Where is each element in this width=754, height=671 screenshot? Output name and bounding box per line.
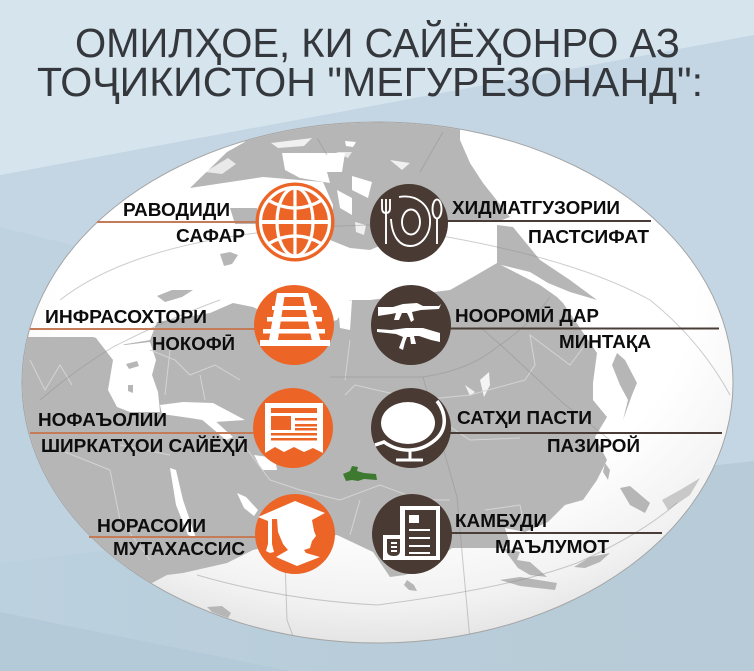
- northern seas and speckles: [205, 138, 410, 235]
- title: ТОҶИКИСТОН "МЕГУРЕЗОНАНД":: [37, 59, 703, 105]
- label: infrastructure: НОКОФӢ: [152, 334, 235, 354]
- label: infrastructure: [45, 307, 235, 354]
- label: lack of information: [455, 511, 609, 557]
- label: lack of information: МАЪЛУМОТ: [495, 537, 609, 557]
- label: tourism companies: ШИРКАТҲОИ САЙЁҲӢ: [41, 435, 248, 456]
- Eurasia and Africa land: [0, 263, 607, 600]
- leader lines: [30, 221, 722, 537]
- label: infrastructure: ИНФРАСОХТОРИ: [45, 307, 207, 327]
- icon: newspaper on banner: [253, 388, 333, 468]
- label: low quality service: ПАСТСИФАТ: [528, 227, 649, 247]
- label: tourism companies: [38, 410, 248, 456]
- icon: desk globe: [371, 388, 451, 468]
- label: low reception level: ПАЗИРОЙ: [547, 435, 640, 456]
- label: low quality service: [452, 198, 649, 247]
- label: regional unrest: [455, 306, 651, 352]
- label: tourism companies: НОФАЪОЛИИ: [38, 410, 167, 430]
- label: specialists: МУТАХАССИС: [113, 539, 245, 559]
- label: regional unrest: МИНТАҚА: [559, 332, 651, 352]
- small Mediterranean islands: [126, 361, 139, 393]
- icon: graduate silhouette: [255, 494, 335, 574]
- icon: documents: [372, 494, 452, 574]
- label: specialists: НОРАСОИИ: [97, 516, 206, 536]
- label: regional unrest: НООРОМӢ ДАР: [455, 306, 599, 326]
- label: low quality service: ХИДМАТГУЗОРИИ: [452, 198, 620, 218]
- title: ОМИЛҲОЕ, КИ САЙЁҲОНРО АЗ: [75, 20, 680, 66]
- peninsula and islands: [157, 225, 700, 618]
- northern land: [190, 118, 510, 250]
- inland seas: [96, 300, 490, 538]
- title: [37, 20, 703, 105]
- label: travel route: РАВОДИДИ: [123, 200, 230, 220]
- label: lack of information: КАМБУДИ: [455, 511, 547, 531]
- label: travel route: САФАР: [176, 226, 245, 246]
- icon: wire globe: [256, 182, 334, 262]
- label: low reception level: САТҲИ ПАСТИ: [457, 408, 592, 428]
- graticule arcs: [40, 132, 730, 640]
- icon: plate and cutlery: [370, 184, 448, 262]
- Tajikistan: [343, 466, 377, 481]
- label: travel route: [123, 200, 245, 246]
- label: low reception level: [457, 408, 640, 456]
- label: specialists: [97, 516, 245, 559]
- country borders: [30, 335, 585, 560]
- icon: railway track: [254, 285, 334, 365]
- world globe map: [0, 118, 734, 644]
- icon: rifles: [371, 285, 451, 365]
